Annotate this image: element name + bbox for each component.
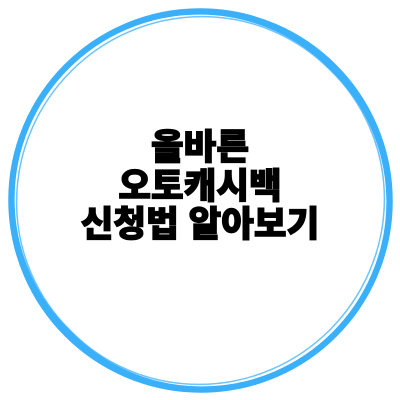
title line 3: 신청법 알아보기 [81,204,319,244]
title line 1: 올바른 [151,127,249,167]
title line 2: 오토캐시백 [118,166,282,206]
title [80,127,319,244]
